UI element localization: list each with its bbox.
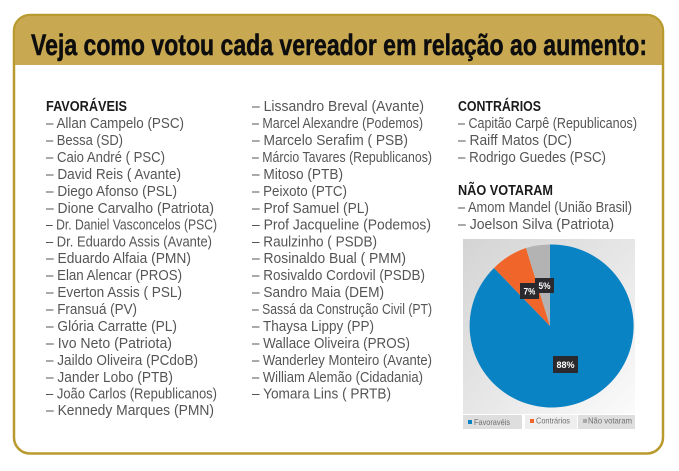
column: favoráveis continued: – Marcelo Serafim ( PSB) [252, 132, 408, 149]
heading: favoráveis: FAVORÁVEIS [46, 98, 127, 115]
list: contrários: – Capitão Carpê (Republicanos) [458, 115, 637, 132]
list: favoráveis: – Ivo Neto (Patriota) [46, 335, 172, 352]
list: contrários: – Raiff Matos (DC) [458, 132, 572, 149]
list: contrários: – Rodrigo Guedes (PSC) [458, 149, 606, 166]
list: não votaram: – Joelson Silva (Patriota) [458, 216, 614, 233]
column: favoráveis continued: – Raulzinho ( PSDB) [252, 234, 377, 250]
column: favoráveis continued: – Wanderley Monteiro (Avante) [252, 352, 432, 369]
list: favoráveis: – Fransuá (PV) [46, 301, 137, 318]
list: favoráveis: – Dr. Eduardo Assis (Avante) [46, 234, 212, 250]
column: favoráveis continued: – Prof Jacqueline (Podemos) [252, 216, 431, 234]
list: não votaram: – Amom Mandel (União Brasil) [458, 199, 632, 216]
list: contrários [458, 115, 637, 166]
column: favoráveis continued: – Lissandro Breval (Avante) [252, 98, 424, 115]
slice: não votaram 5% [526, 244, 550, 326]
slice: favoráveis 88% [470, 244, 634, 407]
label 7% [520, 283, 539, 299]
column: favoráveis [46, 98, 217, 419]
column: não votaram [458, 181, 632, 233]
column: contrários [458, 98, 637, 166]
column: favoráveis continued: – Rosivaldo Cordovil (PSDB) [252, 267, 425, 284]
column: favoráveis continued: – Marcel Alexandre (Podemos) [252, 115, 423, 132]
list: favoráveis: – Bessa (SD) [46, 132, 123, 149]
list: favoráveis: – Elan Alencar (PROS) [46, 267, 182, 284]
column: favoráveis continued: – Wallace Oliveira (PROS) [252, 335, 410, 352]
list: favoráveis [46, 115, 217, 419]
column: favoráveis continued: – Rosinaldo Bual ( PMM) [252, 250, 406, 267]
list: favoráveis: – Eduardo Alfaia (PMN) [46, 250, 191, 267]
column: favoráveis continued: – Prof Samuel (PL) [252, 200, 369, 217]
column: favoráveis continued: – Peixoto (PTC) [252, 183, 347, 200]
list: favoráveis: – David Reis ( Avante) [46, 166, 181, 183]
list: favoráveis: – Jaildo Oliveira (PCdoB) [46, 352, 198, 369]
list: favoráveis: – Kennedy Marques (PMN) [46, 402, 214, 419]
heading: contrários: CONTRÁRIOS [458, 98, 541, 115]
list: favoráveis: – João Carlos (Republicanos) [46, 386, 217, 402]
column: favoráveis continued: – William Alemão (Cidadania) [252, 369, 423, 386]
label 88% [553, 356, 578, 373]
header band [15, 16, 662, 65]
label 88%: 88% [556, 360, 575, 371]
label 5% [535, 278, 554, 293]
legend [463, 415, 635, 429]
list: favoráveis: – Dione Carvalho (Patriota) [46, 200, 214, 217]
legend: Favoravéis [474, 417, 510, 427]
heading: não votaram: NÃO VOTARAM [458, 181, 553, 199]
list: favoráveis: – Diego Afonso (PSL) [46, 183, 177, 200]
column: favoráveis continued: – Mitoso (PTB) [252, 166, 343, 183]
list: não votaram [458, 199, 632, 233]
column: favoráveis continued [252, 98, 432, 402]
list: favoráveis: – Glória Carratte (PL) [46, 318, 177, 335]
list: favoráveis: – Dr. Daniel Vasconcelos (PSC) [46, 216, 217, 234]
label 7%: 7% [524, 286, 536, 298]
list: favoráveis: – Everton Assis ( PSL) [46, 284, 182, 301]
column: favoráveis continued: – Márcio Tavares (Republicanos) [252, 149, 432, 166]
column: favoráveis continued: – Yomara Lins ( PRTB) [252, 386, 391, 402]
list: favoráveis: – Allan Campelo (PSC) [46, 115, 184, 132]
column: favoráveis continued: – Sandro Maia (DEM) [252, 284, 384, 301]
list: favoráveis: – Caio André ( PSC) [46, 149, 165, 166]
pie chart [463, 239, 635, 429]
column: favoráveis continued: – Thaysa Lippy (PP) [252, 318, 374, 335]
legend: Não votaram [588, 416, 632, 426]
legend: Contrários [536, 416, 570, 426]
slice: contrários 7% [494, 248, 550, 326]
label 5%: 5% [538, 281, 551, 292]
list: favoráveis: – Jander Lobo (PTB) [46, 369, 173, 386]
column: favoráveis continued: – Sassá da Construção Civil (PT) [252, 301, 432, 318]
